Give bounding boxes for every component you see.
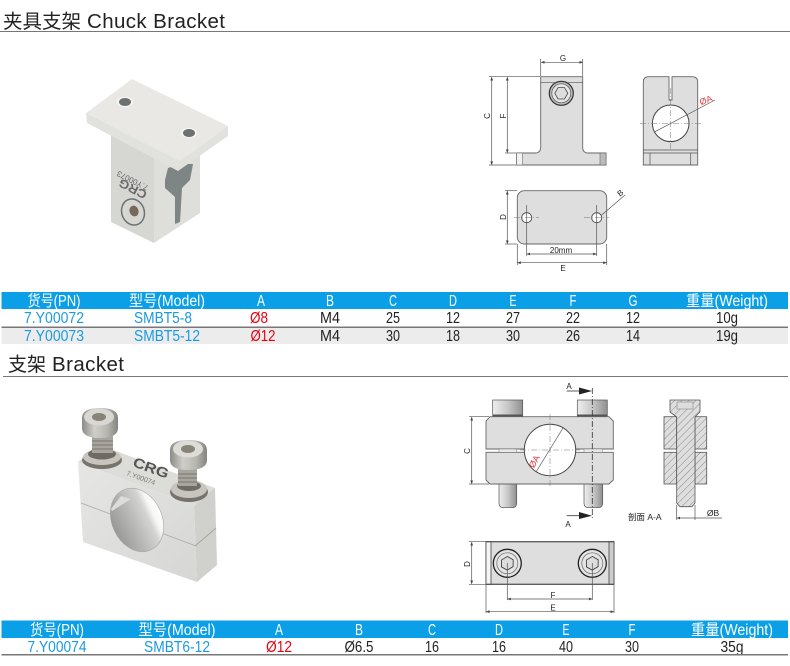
table header: B [355, 622, 363, 639]
dimension C: C [483, 113, 492, 119]
row: 7.Y00072: 12 [626, 310, 640, 327]
plate holes [117, 97, 133, 107]
dimension D: D [463, 561, 472, 567]
row: 7.Y00074: 40 [559, 639, 573, 656]
drawing: chuck bracket front view [483, 54, 606, 165]
row: 7.Y00074: 16 [425, 639, 439, 656]
section arrow bottom [565, 512, 592, 529]
dimension diameter B: ØB [707, 508, 719, 518]
heading: Chuck Bracket [0, 10, 790, 33]
leader: diameter A: ØA [698, 93, 714, 107]
dimension F: F [499, 113, 508, 118]
heading: Bracket: 支架 [8, 354, 46, 376]
top plate [86, 79, 228, 161]
row: 7.Y00072: Ø8 [250, 310, 268, 327]
label: diameter A: ØA [527, 453, 542, 470]
row: 7.Y00072: 12 [446, 310, 460, 327]
bore [100, 480, 174, 560]
row: 7.Y00072: 10g [716, 310, 738, 327]
row: 7.Y00074: 30 [625, 639, 639, 656]
screw heads [493, 400, 523, 417]
dimension G: G [560, 54, 566, 63]
row: 7.Y00072: 27 [506, 310, 520, 327]
heading: Bracket: Bracket [52, 353, 124, 376]
engraved logo: CRG [131, 454, 171, 482]
drawing: chuck bracket bottom view [499, 188, 625, 273]
table header: E [510, 293, 516, 310]
section line [591, 388, 593, 520]
leader: B: B [615, 188, 625, 198]
table header: A [257, 293, 266, 310]
heading: Chuck Bracket: Chuck Bracket [87, 10, 225, 33]
table header: 货号(PN) [28, 292, 80, 310]
row: 7.Y00072: M4 [320, 310, 340, 327]
row: 7.Y00073: SMBT5-12 [134, 328, 200, 345]
row: 7.Y00072 [24, 310, 738, 327]
front face [78, 462, 197, 582]
table: bracket specifications [2, 620, 788, 656]
row: 7.Y00073: M4 [320, 328, 340, 345]
table header: D [495, 622, 503, 639]
section arrow top [566, 382, 592, 394]
right face [194, 488, 217, 582]
dimension C: C [463, 448, 472, 454]
bore split facet [111, 496, 131, 511]
table header: 货号(PN) [30, 621, 84, 639]
table header: B [326, 293, 334, 310]
screw right [170, 440, 208, 502]
row: 7.Y00073: 30 [386, 328, 400, 345]
clamp halves [486, 417, 613, 449]
table header: C [428, 622, 436, 639]
photo: chuck bracket [86, 79, 228, 243]
table header: F [570, 293, 576, 310]
engraved part number: 7.Y00074 [125, 470, 156, 487]
engraved part number: 7.Y00073 [115, 169, 150, 192]
dimension C [463, 417, 489, 484]
table header: 重量(Weight) [686, 292, 768, 310]
table header: 重量(Weight) [691, 621, 773, 639]
row: 7.Y00074: Ø6.5 [344, 639, 374, 656]
section arrow bottom: A [565, 520, 571, 529]
heading: Chuck Bracket: 夹具支架 [3, 11, 81, 33]
body right face [154, 155, 200, 243]
dimension F [507, 563, 592, 600]
engraved logo: CRG [116, 176, 149, 202]
table header: D [449, 293, 457, 310]
screw left [82, 408, 122, 469]
dimension E [486, 585, 614, 613]
row: 7.Y00073: 14 [626, 328, 640, 345]
dimension E: E [550, 604, 556, 612]
row: 7.Y00074 [28, 639, 744, 656]
row: 7.Y00073 [2, 328, 788, 345]
table: chuck bracket specifications [2, 292, 788, 345]
clamp screw [117, 195, 149, 229]
dimension D [463, 542, 486, 584]
table header [2, 292, 788, 310]
table header: A [275, 622, 284, 639]
dimension F: F [551, 591, 556, 600]
row: 7.Y00073: 30 [506, 328, 520, 345]
dimension 20mm: 20mm [550, 246, 572, 255]
table header: G [628, 293, 638, 310]
row: 7.Y00074: 16 [492, 639, 506, 656]
row: 7.Y00073: 18 [446, 328, 460, 345]
drawing: bracket section A-A [628, 400, 722, 522]
row: 7.Y00072: SMBT5-8 [134, 310, 192, 327]
table header: C [389, 293, 397, 310]
section arrow top: A [566, 382, 572, 391]
dimension D: D [499, 214, 508, 220]
heading: Bracket [3, 353, 788, 377]
dimension E: E [560, 264, 566, 273]
row: 7.Y00074: 35g [720, 639, 744, 656]
clamp bore and slot [165, 164, 193, 224]
drawing: bracket front view [463, 382, 613, 529]
screw tips [499, 484, 517, 508]
row: 7.Y00074: SMBT6-12 [144, 639, 210, 656]
row: 7.Y00074: Ø12 [266, 639, 292, 656]
top face [78, 445, 215, 506]
table header: F [628, 622, 636, 639]
bore [524, 424, 576, 476]
drawing: bracket top view [463, 542, 614, 613]
socket screw right [578, 549, 606, 577]
row: 7.Y00072: 22 [566, 310, 580, 327]
table header [2, 620, 788, 639]
row: 7.Y00073: Ø12 [250, 328, 276, 345]
row: 7.Y00073: 19g [716, 328, 738, 345]
socket screw left [493, 549, 521, 577]
row: 7.Y00073: 7.Y00073 [24, 328, 84, 345]
photo: bracket with screws [78, 408, 217, 582]
drawing: chuck bracket side view [640, 77, 715, 165]
label: section A-A: 剖面 A-A [628, 512, 662, 522]
row: 7.Y00073: 26 [566, 328, 580, 345]
row: 7.Y00072: 25 [386, 310, 400, 327]
table header: 型号(Model) [129, 292, 205, 310]
body front face [111, 135, 154, 243]
row: 7.Y00074: 7.Y00074 [28, 639, 87, 656]
row: 7.Y00072: 7.Y00072 [24, 310, 84, 327]
table header: 型号(Model) [138, 621, 216, 639]
table header: E [562, 622, 570, 639]
